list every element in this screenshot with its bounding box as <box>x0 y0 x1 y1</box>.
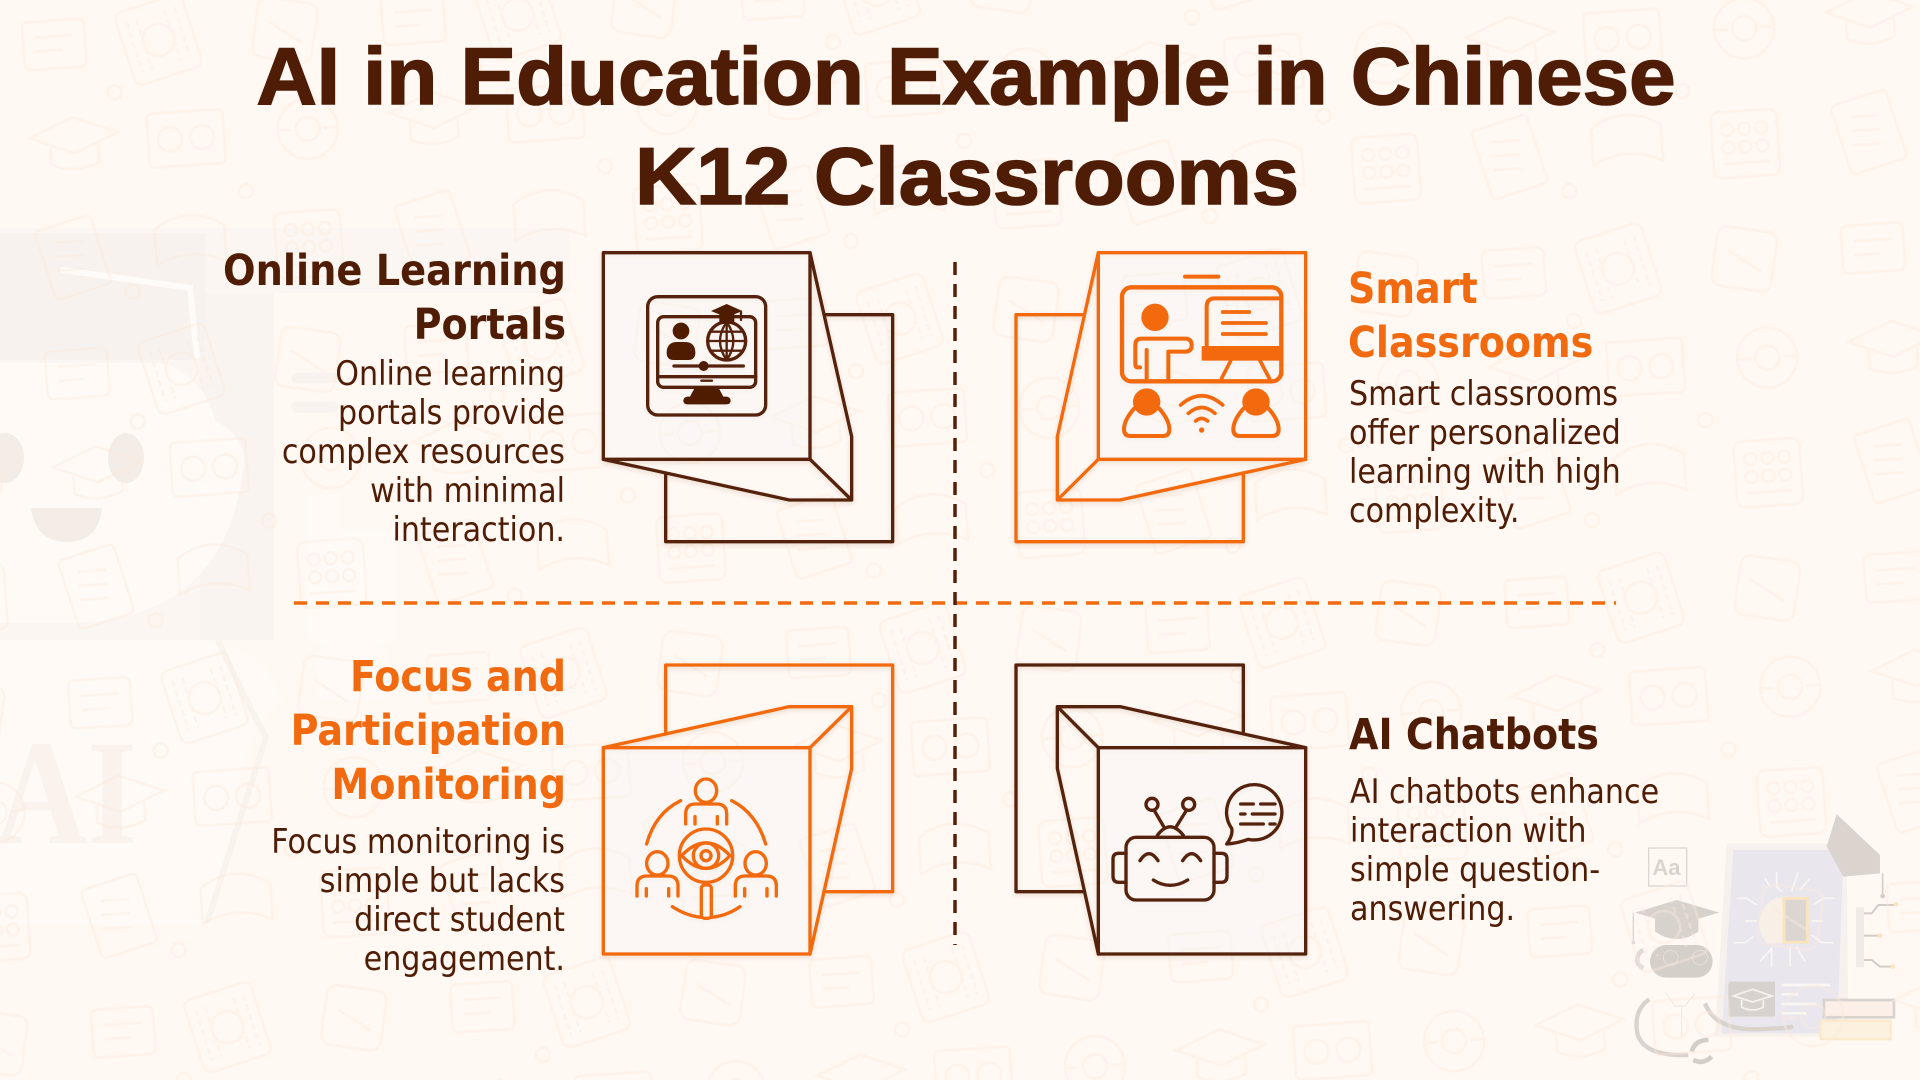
ghost text Aa: Aa <box>1652 855 1681 880</box>
icon: online learning monitor <box>648 297 766 415</box>
text block: smart classrooms: complexity. <box>1349 491 1519 530</box>
text block: online learning portals: interaction. <box>392 510 565 549</box>
text block: focus and participation monitoring: Participation <box>291 706 566 755</box>
icon: smart classroom <box>1122 277 1281 436</box>
text block: smart classrooms: Smart classrooms <box>1349 374 1618 413</box>
text block: AI chatbots <box>1349 710 1659 928</box>
title: K12 Classrooms <box>635 132 1299 222</box>
ghost illustration, bottom right <box>1632 814 1898 1062</box>
text block: focus and participation monitoring: Monitoring <box>331 760 566 809</box>
text block: AI chatbots: answering. <box>1350 889 1515 928</box>
icon: monitoring eye and students <box>637 779 776 918</box>
panel: smart classrooms illustration <box>1016 253 1306 542</box>
title: AI in Education Example in Chinese <box>256 32 1675 122</box>
text block: online learning portals: with minimal <box>370 471 565 510</box>
text block: smart classrooms: offer personalized <box>1349 413 1621 452</box>
text block: focus and participation monitoring: simple but lacks <box>320 861 565 900</box>
icon: chatbot robot with speech bubble <box>1113 785 1282 900</box>
text block: AI chatbots: interaction with <box>1350 811 1586 850</box>
text block: AI chatbots: simple question- <box>1350 850 1600 889</box>
panel: AI chatbots illustration <box>1016 665 1306 954</box>
text block: focus and participation monitoring: direct student <box>354 900 565 939</box>
text block: smart classrooms: Smart <box>1348 264 1478 313</box>
text block: online learning portals: Online learning <box>335 354 565 393</box>
text block: online learning portals: complex resources <box>282 432 565 471</box>
text block: focus and participation monitoring: Focus and <box>350 652 566 701</box>
text block: online learning portals <box>223 246 566 549</box>
text block: smart classrooms <box>1348 264 1621 530</box>
text block: online learning portals: Online Learning <box>223 246 566 295</box>
text block: online learning portals: Portals <box>414 300 566 349</box>
ghost robot illustration, left <box>0 228 570 925</box>
panel: online learning portals illustration <box>603 253 893 542</box>
text block: focus and participation monitoring: engagement. <box>364 939 565 978</box>
text block: smart classrooms: learning with high <box>1349 452 1621 491</box>
text block: smart classrooms: Classrooms <box>1348 318 1593 367</box>
text block: AI chatbots: AI Chatbots <box>1349 710 1599 759</box>
divider: vertical dashed <box>953 262 957 945</box>
text block: online learning portals: portals provide <box>338 393 565 432</box>
text block: focus and participation monitoring <box>271 652 566 978</box>
text block: focus and participation monitoring: Focus monitoring is <box>271 822 565 861</box>
panel: focus and participation monitoring illustration <box>603 665 893 954</box>
divider: horizontal dashed <box>294 601 1616 605</box>
text block: AI chatbots: AI chatbots enhance <box>1350 772 1659 811</box>
ghost text AI: AI <box>0 710 137 876</box>
title <box>256 32 1675 222</box>
